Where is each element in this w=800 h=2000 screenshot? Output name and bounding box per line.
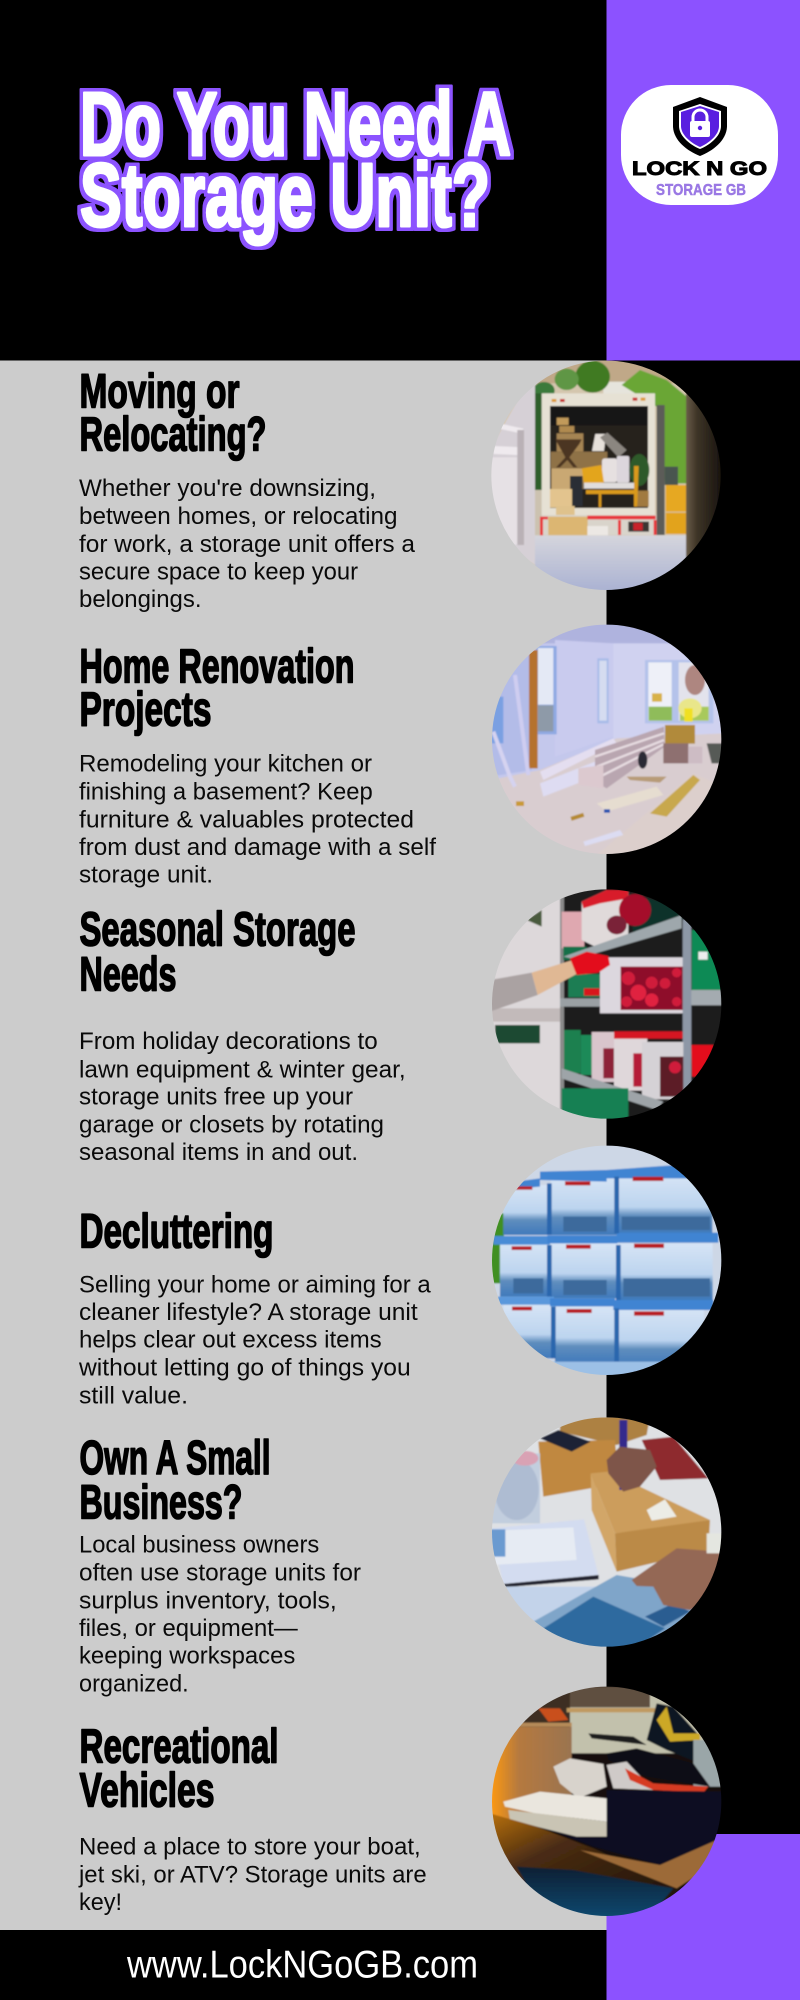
text block: storage units free up your <box>79 1083 353 1110</box>
photo: seasonal storage shelves <box>490 887 723 1122</box>
logo wordmark: LOCK N GO <box>632 159 767 180</box>
background: top black band <box>0 0 606 360</box>
text block: Need a place to store your boat, <box>79 1834 421 1861</box>
heading: Projects <box>80 684 212 736</box>
photo: moving truck <box>491 360 721 590</box>
text block: organized. <box>79 1671 189 1698</box>
heading <box>80 366 266 462</box>
title: Do You Need A <box>80 75 511 175</box>
text block: lawn equipment & winter gear, <box>79 1056 406 1083</box>
panel: seasonal storage <box>79 904 406 1166</box>
text block <box>78 1271 431 1409</box>
heading <box>80 904 356 1002</box>
background: right black column <box>606 360 800 1834</box>
text block <box>79 475 416 613</box>
text block: cleaner lifestyle? A storage unit <box>79 1299 418 1326</box>
heading: Home Renovation <box>80 640 354 694</box>
heading: Decluttering <box>80 1206 274 1258</box>
text block: furniture & valuables protected <box>79 806 414 833</box>
text block: still value. <box>79 1382 188 1409</box>
background: grey content panel <box>0 360 606 1930</box>
text block: Local business owners <box>79 1532 319 1559</box>
text block: between homes, or relocating <box>79 503 398 530</box>
background: footer black band <box>0 1930 606 2000</box>
background: top purple column <box>606 0 800 360</box>
text block: jet ski, or ATV? Storage units are <box>78 1862 427 1889</box>
background: bottom purple block <box>606 1834 800 2000</box>
heading: Own A Small <box>80 1432 270 1485</box>
logo sub-wordmark: STORAGE GB <box>656 182 746 199</box>
text block <box>79 1028 406 1166</box>
text block: From holiday decorations to <box>79 1028 378 1055</box>
text block: key! <box>79 1889 122 1916</box>
text block: secure space to keep your <box>79 558 358 586</box>
footer url: www.LockNGoGB.com <box>126 1943 478 1986</box>
text block <box>79 1532 361 1698</box>
heading: Seasonal Storage <box>80 904 356 956</box>
panel: decluttering <box>78 1206 431 1409</box>
heading: Relocating? <box>80 408 266 462</box>
text block: often use storage units for <box>79 1560 361 1587</box>
text block: from dust and damage with a self <box>79 834 436 861</box>
text block: surplus inventory, tools, <box>79 1587 337 1614</box>
text block: Selling your home or aiming for a <box>79 1271 431 1298</box>
logo badge <box>621 85 778 205</box>
text block: Whether you're downsizing, <box>79 475 376 502</box>
text block: for work, a storage unit offers a <box>79 531 416 558</box>
text block: without letting go of things you <box>78 1354 411 1381</box>
photo: small business packing <box>490 1415 723 1650</box>
heading: Needs <box>80 948 176 1002</box>
icon: shield with padlock <box>673 97 727 156</box>
text block: helps clear out excess items <box>79 1326 382 1353</box>
heading: Vehicles <box>80 1764 214 1818</box>
text block: garage or closets by rotating <box>79 1111 384 1138</box>
text block: files, or equipment— <box>79 1615 298 1642</box>
text block: finishing a basement? Keep <box>79 778 373 805</box>
text block: belongings. <box>79 586 202 613</box>
heading: Moving or <box>80 366 240 418</box>
panel: recreational vehicles <box>78 1720 427 1916</box>
heading <box>80 1720 278 1818</box>
photo: stacked clear bins <box>490 1143 723 1378</box>
title: Storage Unit? <box>80 146 490 246</box>
text block: seasonal items in and out. <box>79 1139 358 1166</box>
text block <box>78 1834 427 1916</box>
panel: moving or relocating <box>79 366 416 613</box>
panel: small business <box>79 1432 361 1698</box>
text block: keeping workspaces <box>79 1643 295 1670</box>
heading: Business? <box>80 1476 242 1530</box>
text block: Remodeling your kitchen or <box>79 751 372 778</box>
heading: Recreational <box>80 1720 278 1774</box>
text block <box>79 751 436 888</box>
photo: jet ski in garage <box>490 1683 723 1920</box>
heading <box>80 1432 270 1530</box>
photo: home renovation <box>490 623 723 857</box>
heading <box>80 640 354 736</box>
title <box>80 75 511 246</box>
panel: home renovation <box>79 640 436 888</box>
text block: storage unit. <box>79 861 213 888</box>
